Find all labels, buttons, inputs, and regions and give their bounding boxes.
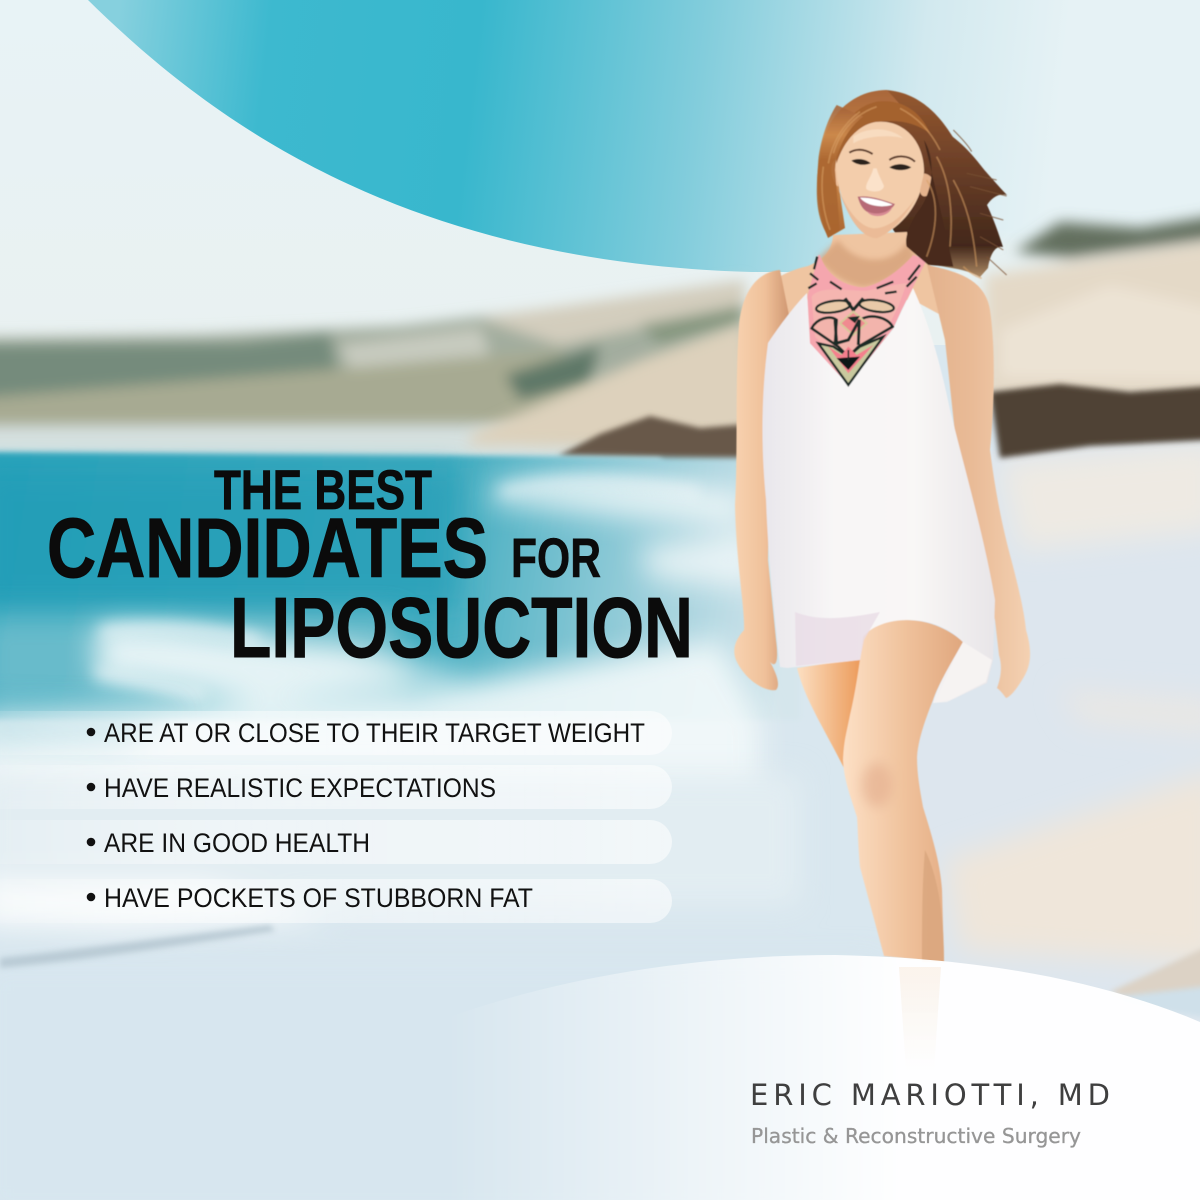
back hair xyxy=(860,90,1007,277)
right eye xyxy=(889,164,911,170)
necklace panel xyxy=(807,255,927,385)
sea xyxy=(0,452,800,720)
dark rocks xyxy=(558,384,1200,476)
sky patch right of figure xyxy=(960,240,1200,310)
left eye xyxy=(851,159,871,165)
right side beach xyxy=(900,440,1200,1040)
face and necklace, zoomed coordinates xyxy=(807,101,1007,385)
face xyxy=(831,122,933,238)
foam streaks xyxy=(95,482,700,695)
shoulders and chest xyxy=(760,232,950,343)
criterion 4 xyxy=(0,879,672,923)
front hair sweep xyxy=(836,101,930,163)
distant hills xyxy=(0,280,760,462)
right arm and hand xyxy=(927,265,1030,698)
white dress xyxy=(762,288,995,703)
wind-blown strands xyxy=(953,130,1007,275)
title: THE BEST xyxy=(214,458,432,521)
sand dunes xyxy=(470,215,1200,450)
criterion 3 xyxy=(0,820,672,864)
front leg xyxy=(843,620,963,962)
hair texture strands xyxy=(822,107,982,278)
title: CANDIDATES xyxy=(47,501,488,595)
title: FOR xyxy=(511,526,601,589)
nose xyxy=(866,168,884,192)
teal swoosh xyxy=(88,0,1200,272)
criterion 1: ARE AT OR CLOSE TO THEIR TARGET WEIGHT xyxy=(104,718,645,748)
knee shading xyxy=(862,763,892,807)
criterion 2: HAVE REALISTIC EXPECTATIONS xyxy=(104,773,496,803)
bottom white curve xyxy=(440,955,1200,1200)
logo: practice name xyxy=(750,1078,1110,1148)
sand specks xyxy=(1110,945,1200,1000)
wet sand and wave line xyxy=(0,705,880,1200)
sheer hem shading xyxy=(795,612,880,666)
faded feet xyxy=(899,967,941,1070)
title xyxy=(47,458,693,676)
left arm and hand xyxy=(734,270,790,690)
criterion 4: HAVE POCKETS OF STUBBORN FAT xyxy=(104,883,533,913)
woman xyxy=(734,90,1030,962)
criterion 3: ARE IN GOOD HEALTH xyxy=(104,828,370,858)
eyebrows xyxy=(849,150,915,162)
title: LIPOSUCTION xyxy=(230,581,693,676)
logo: practice name: Plastic & Reconstructive Surgery xyxy=(751,1124,1081,1148)
back leg xyxy=(797,658,862,790)
logo: practice name: ERIC MARIOTTI, MD xyxy=(750,1078,1110,1112)
left hair xyxy=(817,90,905,238)
neck shadow xyxy=(818,240,915,287)
surf foam xyxy=(0,478,760,800)
criterion 2 xyxy=(0,765,672,809)
list: candidate criteria xyxy=(0,711,672,923)
mouth xyxy=(858,196,895,214)
criterion 1 xyxy=(0,711,672,755)
